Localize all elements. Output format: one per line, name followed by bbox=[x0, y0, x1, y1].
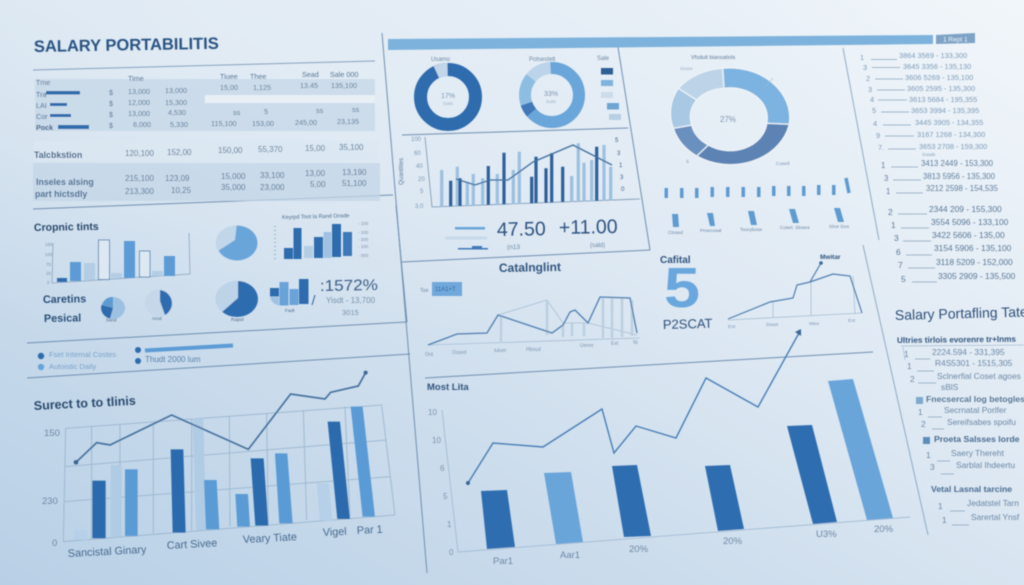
line chart: catalnglint: Ont bbox=[425, 352, 434, 358]
list: right lower: 1 bbox=[918, 407, 923, 417]
list: right lower: 1 bbox=[904, 349, 909, 359]
panel: salary table: 23,135 bbox=[337, 117, 359, 126]
big donut chart: 27% bbox=[720, 115, 736, 124]
list: upper values: 3813 5956 - 135,300 bbox=[923, 172, 996, 181]
stat: big five bbox=[660, 255, 713, 332]
list: right lower: 1 bbox=[938, 501, 943, 511]
line chart: catalnglint: Catalnglint bbox=[499, 260, 561, 275]
bar and line chart: bottom left: Veary Tiate bbox=[243, 531, 297, 546]
bar and line chart: centre: 5 bbox=[420, 189, 424, 195]
panel: salary table: Tiuee bbox=[220, 72, 238, 81]
small bars with captions: Proecosal bbox=[700, 228, 721, 234]
bar chart: cropnic tints: 100 bbox=[45, 252, 53, 257]
kpi: values: 47.50 bbox=[497, 218, 546, 241]
panel: salary table: 35,000 bbox=[221, 183, 246, 192]
panel: salary table: 4,530 bbox=[168, 108, 186, 117]
list: upper values: 3154 5906 - 135,100 bbox=[934, 243, 1012, 253]
panel: salary table: 120,100 bbox=[125, 149, 154, 158]
line chart: mwitar: Dsset bbox=[766, 322, 779, 328]
list: upper values: 3 bbox=[863, 63, 867, 72]
big donut chart: S bbox=[686, 159, 689, 164]
top header bar: 1 Rept 1 bbox=[943, 36, 968, 44]
list: right lower: Fnecsercal log betogles bbox=[926, 394, 1024, 404]
bar chart: cropnic tints bbox=[45, 233, 190, 285]
small pie: arnd bbox=[145, 290, 173, 321]
panel: salary table: Time bbox=[128, 74, 144, 83]
donut chart: potsestelt: 33% bbox=[544, 91, 558, 98]
panel: salary table: LAI bbox=[36, 101, 47, 110]
panel: salary table: 51,100 bbox=[342, 179, 367, 188]
panel: salary table: $ bbox=[109, 110, 113, 119]
list: right lower: Sarblal Ihdeertu bbox=[956, 460, 1015, 470]
bar and line chart: bottom left: Vigel bbox=[323, 526, 347, 539]
line chart: catalnglint: Ossed bbox=[452, 350, 467, 356]
line chart: catalnglint: tuluer bbox=[494, 348, 507, 354]
list: upper values: 7 bbox=[898, 260, 903, 270]
labels: caretins and pesical: Pesical bbox=[44, 312, 81, 325]
panel: salary table: 15,00 bbox=[305, 144, 326, 153]
panel: salary table: $ bbox=[109, 88, 113, 97]
list: upper values: 3212 2598 - 154,535 bbox=[926, 184, 999, 193]
bar and line chart: most lita: 20% bbox=[874, 524, 894, 535]
small bars with captions: Shor Dos bbox=[829, 224, 850, 230]
panel: salary table: 13,190 bbox=[342, 168, 367, 177]
stat: big five: 5 bbox=[664, 256, 700, 320]
line chart: mwitar: Ent bbox=[848, 318, 856, 324]
list: upper values: 3 bbox=[868, 85, 872, 94]
list: upper values: 2344 209 - 155,300 bbox=[929, 204, 1002, 214]
bar and line chart: most lita: 5 bbox=[443, 492, 448, 501]
list: right lower: R4S5301 - 1515,305 bbox=[935, 358, 1013, 368]
big donut chart bbox=[670, 55, 790, 166]
list: right lower bbox=[897, 335, 1024, 525]
line chart: mwitar: Ntee bbox=[809, 321, 819, 327]
list: upper values: 6 bbox=[896, 247, 901, 257]
small bars with captions: Closed bbox=[668, 230, 683, 236]
mini bar chart: - 000 bbox=[358, 253, 369, 258]
panel: salary table: 215,100 bbox=[125, 174, 154, 183]
list: right lower: 1 bbox=[942, 515, 947, 525]
panel: salary table: 15,000 bbox=[221, 172, 246, 181]
list: right lower: Vetal Lasnal tarcine bbox=[931, 484, 1012, 494]
panel: salary table: 150,00 bbox=[218, 146, 243, 155]
panel: salary table: 13,000 bbox=[128, 87, 150, 96]
combined bars icon bbox=[270, 279, 315, 314]
line chart: catalnglint: 11A1+T bbox=[435, 287, 456, 293]
list: upper values: 3422 5606 - 135,00 bbox=[932, 230, 1005, 240]
panel: salary table: $ bbox=[109, 121, 113, 130]
panel: salary table: 13,00 bbox=[305, 169, 326, 178]
bar and line chart: most lita: 10 bbox=[428, 408, 437, 417]
list: upper values: 2 bbox=[866, 74, 870, 83]
line chart: catalnglint bbox=[420, 260, 640, 358]
panel: salary table: Cor bbox=[36, 112, 48, 121]
list: right lower: 1 bbox=[907, 361, 912, 371]
heading: salary portafling: Salary Portafling Tate bbox=[895, 304, 1024, 323]
donut chart: usamo bbox=[411, 57, 485, 134]
bar and line chart: most lita: Most Lita bbox=[427, 382, 469, 393]
donut chart: usamo: 17% bbox=[441, 93, 455, 100]
bar and line chart: centre bbox=[399, 137, 640, 210]
panel: salary table: 6,000 bbox=[133, 120, 151, 129]
panel: salary table: Tme bbox=[36, 78, 50, 87]
tick bars row bbox=[664, 178, 849, 198]
list: upper values: 3653 2708 - 159,300 bbox=[919, 142, 987, 151]
kpi: values bbox=[445, 216, 618, 251]
legend: right with bar: Thudt 2000 lum bbox=[145, 355, 201, 364]
line chart: catalnglint: Ni bbox=[633, 340, 638, 346]
panel: salary table: 23,000 bbox=[260, 183, 285, 192]
list: right lower: Sereifsabes spoifu bbox=[947, 417, 1016, 427]
bar and line chart: centre: 3 bbox=[620, 175, 624, 181]
mini bar chart: - 100 bbox=[358, 244, 369, 249]
line chart: catalnglint: Ext bbox=[611, 341, 619, 347]
list: upper values: 3605 2595 - 135,300 bbox=[907, 84, 975, 93]
list: right lower: Secrnatal Porlfer bbox=[944, 405, 1007, 415]
bar and line chart: bottom left: 0 bbox=[52, 538, 57, 549]
donut chart: usamo: Suits bbox=[443, 101, 454, 106]
pie chart: rapid bbox=[215, 281, 258, 323]
list: upper values: 3653 3994 - 135,395 bbox=[911, 106, 979, 115]
panel: salary table: 5 bbox=[264, 107, 268, 116]
bar and line chart: bottom left: Cart Sivee bbox=[167, 537, 217, 552]
panel: salary table: 13.45 bbox=[300, 81, 318, 90]
bar and line chart: most lita: 20% bbox=[629, 544, 649, 555]
list: upper values: 4 bbox=[870, 95, 874, 104]
list: right lower: sBlS bbox=[941, 382, 959, 392]
panel: salary table: Sale 000 bbox=[330, 70, 358, 79]
bar chart: cropnic tints: 0 bbox=[47, 280, 50, 285]
list: upper values: 3606 5269 - 135,100 bbox=[905, 73, 973, 82]
panel: salary table: 12,000 bbox=[128, 98, 150, 107]
bar and line chart: most lita: U3% bbox=[816, 529, 837, 540]
panel: salary table: 135,100 bbox=[331, 81, 357, 90]
legend: left: Autoistic Daily bbox=[49, 362, 96, 371]
bar and line chart: most lita: 20% bbox=[723, 536, 743, 547]
list: right lower: Jedatstel Tarn bbox=[967, 498, 1019, 508]
big donut chart: Vfsduit biansatiols bbox=[691, 55, 736, 61]
bar and line chart: centre: 3.0 bbox=[415, 204, 424, 210]
bar and line chart: most lita: Par1 bbox=[493, 556, 513, 567]
heading: cropnic tints: Cropnic tints bbox=[34, 221, 99, 234]
panel: salary table: Talcbkstion bbox=[34, 150, 82, 160]
panel: salary table: $ bbox=[109, 99, 113, 108]
panel: salary table: Thee bbox=[250, 72, 266, 81]
kpi: values: (n13 bbox=[507, 244, 520, 251]
line chart: catalnglint: Ueree bbox=[580, 343, 594, 349]
legend: right with bar bbox=[135, 346, 233, 364]
panel: salary table: Tra bbox=[36, 90, 47, 99]
list: upper values: 3554 5096 - 133,100 bbox=[931, 217, 1009, 227]
bar and line chart: centre: 3 bbox=[617, 151, 621, 157]
mini bar chart: - 200 bbox=[358, 237, 369, 242]
list: upper values: 3 bbox=[884, 174, 888, 183]
list: right lower: 3 bbox=[930, 462, 935, 472]
list: right lower: 2224.594 - 331,395 bbox=[932, 347, 1005, 357]
kpi: values: +11.00 bbox=[559, 216, 618, 239]
stat: big five: Cafital bbox=[660, 255, 691, 266]
bar and line chart: most lita: 1 bbox=[447, 520, 452, 529]
stat: 1572 percent: :1572% bbox=[320, 277, 378, 295]
stat: 1572 percent: 3015 bbox=[342, 308, 359, 317]
panel: salary table: 13,000 bbox=[165, 86, 187, 95]
pie chart: rapid: Rapid bbox=[231, 317, 244, 323]
bar and line chart: most lita bbox=[427, 329, 910, 567]
bar and line chart: bottom left: 230 bbox=[42, 496, 58, 507]
list: upper values: 9 bbox=[876, 131, 880, 140]
list: upper values: 4 bbox=[873, 119, 877, 128]
bar and line chart: bottom left: Sancistal Ginary bbox=[68, 544, 147, 560]
bar and line chart: centre: 5 bbox=[615, 138, 619, 144]
donut chart: usamo: Usamo bbox=[431, 57, 451, 63]
bar chart: cropnic tints: 75 bbox=[46, 262, 52, 267]
combined bars icon: Fadt bbox=[285, 308, 295, 314]
list: upper values: 3167 1268 - 134,300 bbox=[917, 130, 985, 139]
panel: salary table: ss bbox=[316, 106, 324, 115]
panel: salary table: ss bbox=[352, 105, 360, 114]
top header bar bbox=[388, 33, 975, 50]
line chart: catalnglint: Tse bbox=[420, 288, 429, 294]
small pie: sand: Sand bbox=[106, 318, 117, 322]
stat: 1572 percent: Yisdt - 13,700 bbox=[326, 296, 376, 305]
donut chart: potsestelt: Potsestelt bbox=[529, 57, 556, 63]
pie chart: top bbox=[216, 225, 258, 260]
bar and line chart: bottom left: 150 bbox=[44, 428, 60, 439]
bar chart: cropnic tints: 25 bbox=[46, 271, 52, 276]
list: upper values: 1 bbox=[860, 53, 864, 62]
labels: caretins and pesical bbox=[43, 293, 86, 325]
panel: salary table: 123,09 bbox=[165, 174, 190, 183]
list: right lower: 2 bbox=[910, 374, 915, 384]
heading: surect: Surect to to tlinis bbox=[33, 394, 136, 413]
panel: salary table: Pock bbox=[36, 123, 53, 132]
bar and line chart: centre: 0 bbox=[621, 187, 625, 193]
bar and line chart: centre: 100 bbox=[411, 137, 422, 143]
big donut chart: Sease bbox=[680, 66, 693, 71]
panel: salary table: 55,370 bbox=[258, 145, 283, 154]
mini bar chart bbox=[275, 213, 369, 259]
list: upper values: 1 bbox=[891, 220, 896, 230]
line chart: mwitar bbox=[728, 254, 862, 330]
panel: salary table: 13,000 bbox=[128, 109, 150, 118]
list: upper values: 1 bbox=[881, 161, 885, 170]
panel: salary table: 115,100 bbox=[211, 119, 236, 128]
panel: salary table: 15,00 bbox=[220, 83, 238, 92]
panel: salary table: 33,100 bbox=[260, 171, 285, 180]
bar and line chart: bottom left bbox=[42, 371, 395, 560]
small pie: sand bbox=[101, 297, 125, 322]
bar and line chart: centre: 1 bbox=[619, 163, 623, 169]
panel: salary table bbox=[33, 70, 380, 201]
list: upper values: 7. bbox=[878, 143, 884, 152]
bar and line chart: centre: Quantities bbox=[399, 158, 405, 185]
small pie: arnd: Arnd bbox=[152, 316, 162, 321]
panel: salary table: 35,100 bbox=[339, 143, 364, 152]
panel: salary table: 15,300 bbox=[165, 98, 187, 107]
list: upper values: 3864 3569 - 133,300 bbox=[899, 51, 967, 60]
list: right lower: 1 bbox=[926, 450, 931, 460]
list: right lower: Sarertal Ynsf bbox=[971, 512, 1020, 522]
kpi: values: (sald) bbox=[590, 243, 605, 249]
mini bar chart: - 100 bbox=[358, 230, 369, 235]
donut chart: potsestelt: Suits bbox=[546, 99, 557, 104]
panel: salary table: 1,125 bbox=[253, 83, 271, 92]
panel: salary table: ss bbox=[233, 108, 241, 117]
list: upper values: 3413 2449 - 153,300 bbox=[921, 159, 994, 168]
list: upper values: Goods bbox=[922, 152, 936, 157]
legend: donut swatches: Sale bbox=[597, 56, 610, 62]
line chart: mwitar: Ent bbox=[728, 324, 736, 330]
bar and line chart: centre: 60 bbox=[414, 151, 421, 157]
panel: salary table: 5,330 bbox=[170, 120, 188, 129]
labels: caretins and pesical: Caretins bbox=[43, 293, 86, 306]
stat: big five: P2SCAT bbox=[663, 316, 713, 332]
stat: 1572 percent bbox=[320, 277, 378, 317]
mini bar chart: Keyrpd Toot la Rand Onsde bbox=[282, 213, 350, 221]
list: upper values: 2 bbox=[888, 207, 893, 217]
list: right lower: 2 bbox=[921, 419, 926, 429]
list: right lower: Saery Thereht bbox=[951, 448, 1005, 458]
legend: left bbox=[38, 350, 116, 371]
list: upper values: 3613 5684 - 195,355 bbox=[909, 95, 977, 104]
big donut chart: Cowell bbox=[776, 161, 790, 166]
bar and line chart: most lita: Aar1 bbox=[560, 550, 580, 561]
list: right lower: Ultries tirlois evorenre tr+lnms bbox=[897, 335, 1016, 345]
small bars with captions bbox=[668, 208, 850, 236]
panel: salary table: 245,00 bbox=[295, 118, 317, 127]
panel: salary table: 152,00 bbox=[167, 148, 192, 157]
legend: left: Fset Internal Costes bbox=[49, 350, 116, 359]
list: upper values: 3445 3905 - 134,355 bbox=[915, 118, 983, 127]
bar and line chart: bottom left: Par 1 bbox=[357, 524, 383, 537]
panel: salary table: 153,00 bbox=[252, 119, 274, 128]
panel: salary table: Inseles alsing bbox=[36, 177, 94, 187]
legend: donut swatches bbox=[597, 56, 621, 120]
list: upper values: 3118 5209 - 152,000 bbox=[936, 257, 1013, 267]
list: upper values: 3305 2909 - 135,500 bbox=[938, 271, 1016, 281]
list: upper values: 5 bbox=[872, 106, 876, 115]
mini bar chart: - 100 bbox=[358, 221, 369, 226]
bar and line chart: most lita: 6 bbox=[440, 464, 445, 473]
line chart: mwitar: Mwitar bbox=[820, 254, 841, 261]
bar and line chart: most lita: 10 bbox=[432, 436, 441, 445]
bar and line chart: centre: 20 bbox=[418, 177, 425, 183]
list: upper values: 3 bbox=[894, 233, 899, 243]
bar and line chart: most lita: 0 bbox=[449, 548, 454, 557]
bar and line chart: centre: 40 bbox=[416, 164, 423, 170]
donut chart: potsestelt bbox=[514, 57, 590, 133]
list: upper values: 3645 3356 - 135,130 bbox=[903, 62, 971, 71]
list: upper values: 1 bbox=[886, 187, 890, 196]
panel: salary table: 5,00 bbox=[310, 180, 326, 189]
panel: salary table: 213,300 bbox=[125, 187, 154, 196]
small bars with captions: Tourybose bbox=[740, 227, 762, 233]
list: right lower: Proeta Salsses lorde bbox=[934, 434, 1020, 444]
panel: salary table: part hictsdly bbox=[35, 189, 87, 199]
small bars with captions: Coset. Sloses bbox=[780, 225, 810, 231]
list: upper values: 5 bbox=[901, 274, 906, 284]
list: upper values bbox=[860, 51, 1016, 284]
panel: salary table: 10,25 bbox=[171, 186, 192, 195]
line chart: catalnglint: Hboud bbox=[526, 347, 541, 353]
list: right lower: Sclnerfial Coset agoes bbox=[937, 371, 1021, 381]
bar chart: cropnic tints: 150 bbox=[45, 242, 53, 247]
title: SALARY PORTABILITIS bbox=[34, 35, 219, 56]
panel: salary table: Sead bbox=[302, 70, 319, 79]
